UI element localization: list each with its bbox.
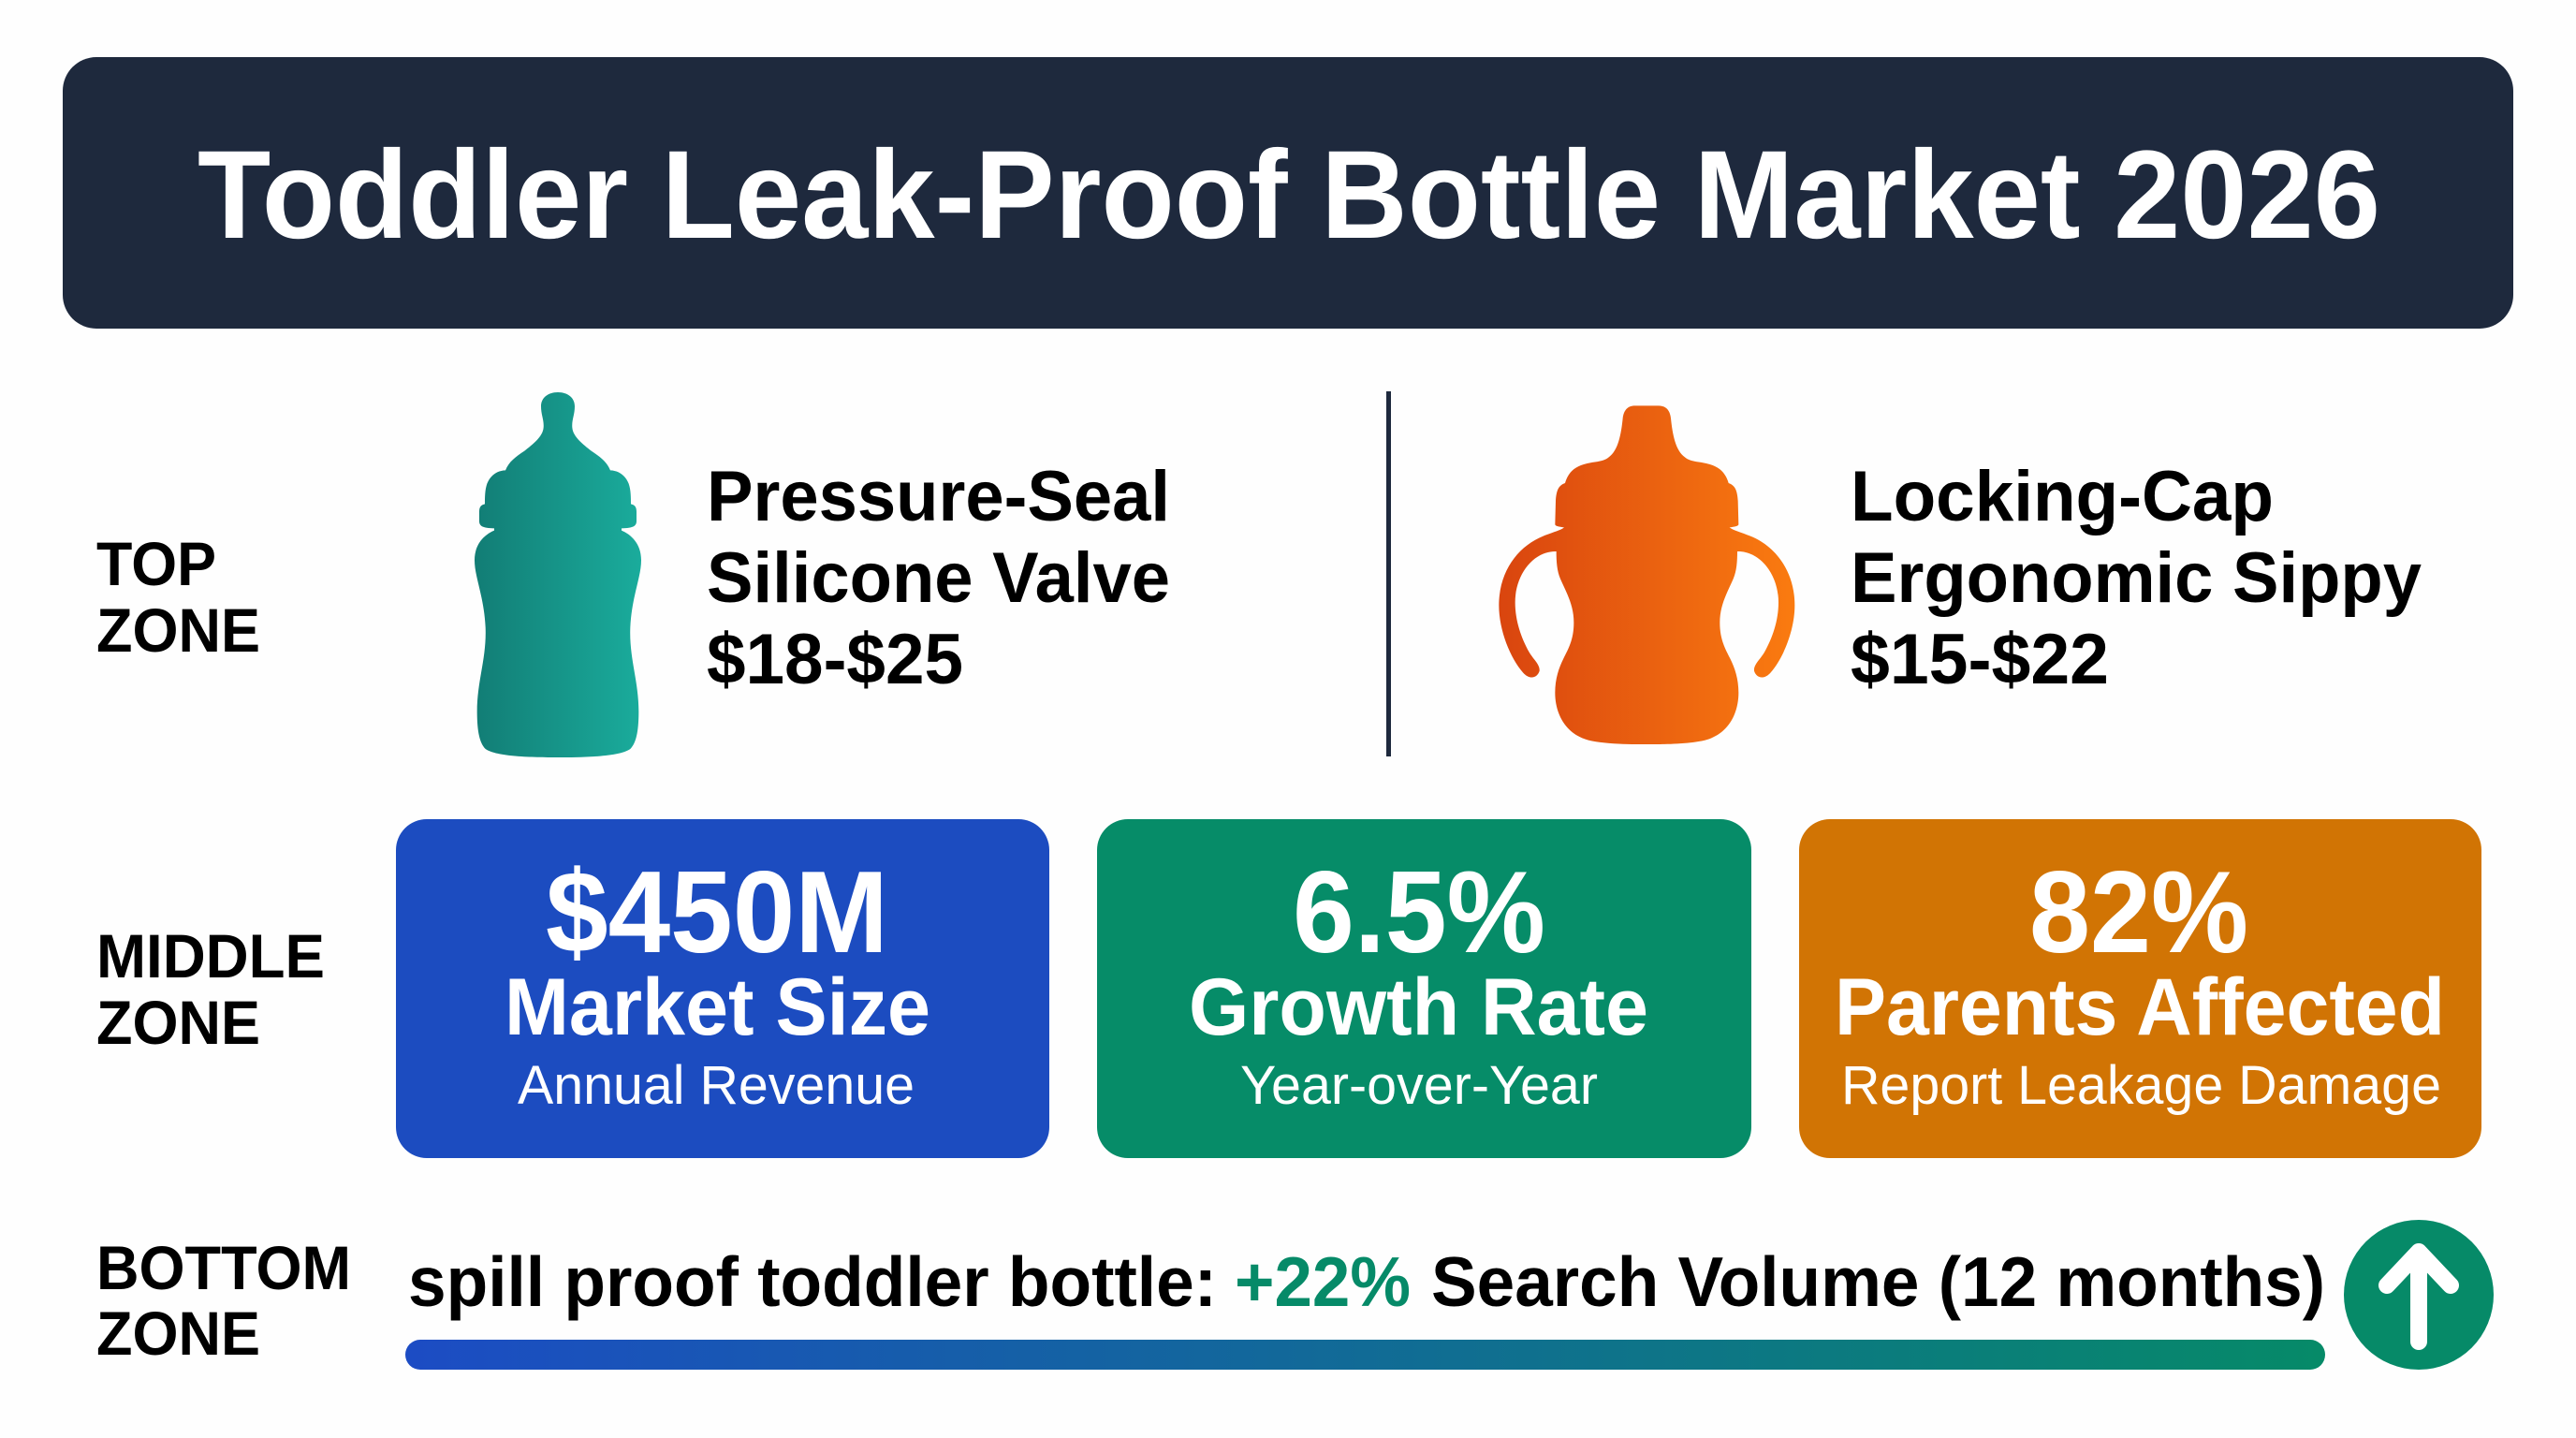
search trend text (408, 1242, 2325, 1321)
icon: orange sippy cup (1499, 405, 1794, 744)
stat note: Annual Revenue (518, 1055, 915, 1116)
stat name: Growth Rate (1189, 962, 1648, 1052)
zone label: bottom: ZONE (96, 1299, 260, 1368)
search trend text: spill proof toddler bottle: (408, 1242, 1217, 1321)
product: locking-cap sippy (1499, 405, 2422, 744)
stat card: parents affected (1799, 819, 2481, 1158)
title: Toddler Leak-Proof Bottle Market 2026 (198, 125, 2380, 265)
stat card: market size (396, 819, 1049, 1158)
zone label: middle: MIDDLE (96, 921, 325, 990)
zone label: top: TOP (96, 529, 216, 598)
icon: teal baby bottle (475, 392, 641, 757)
trend gradient bar (405, 1340, 2325, 1370)
product text: locking-cap: Ergonomic Sippy (1851, 538, 2422, 618)
product text: pressure-seal: Pressure-Seal (707, 457, 1170, 536)
title banner (63, 57, 2513, 329)
zone label: top: ZONE (96, 595, 260, 665)
zone label: middle (96, 921, 325, 1057)
zone label: middle: ZONE (96, 988, 260, 1057)
product text: pressure-seal: Silicone Valve (707, 538, 1170, 618)
stat name: Market Size (505, 962, 930, 1052)
product text: locking-cap: $15-$22 (1851, 620, 2109, 699)
stat card: growth rate (1097, 819, 1751, 1158)
product: pressure-seal bottle (475, 392, 1170, 757)
stat name: Parents Affected (1835, 962, 2445, 1052)
stat note: Year-over-Year (1240, 1055, 1598, 1116)
zone label: top (96, 529, 260, 665)
search trend text: +22% (1235, 1242, 1411, 1321)
product text: locking-cap (1851, 457, 2422, 699)
stat value: $450M (546, 848, 888, 977)
product text: pressure-seal: $18-$25 (707, 620, 963, 699)
divider (1386, 391, 1391, 756)
product text: locking-cap: Locking-Cap (1851, 457, 2274, 536)
stat note: Report Leakage Damage (1841, 1055, 2441, 1116)
icon: up arrow circle (2344, 1220, 2494, 1370)
stat value: 6.5% (1293, 848, 1545, 977)
zone label: bottom: BOTTOM (96, 1233, 351, 1302)
product text: pressure-seal (707, 457, 1170, 699)
stat value: 82% (2029, 848, 2248, 977)
zone label: bottom (96, 1233, 351, 1368)
search trend text: Search Volume (12 months) (1431, 1242, 2325, 1321)
